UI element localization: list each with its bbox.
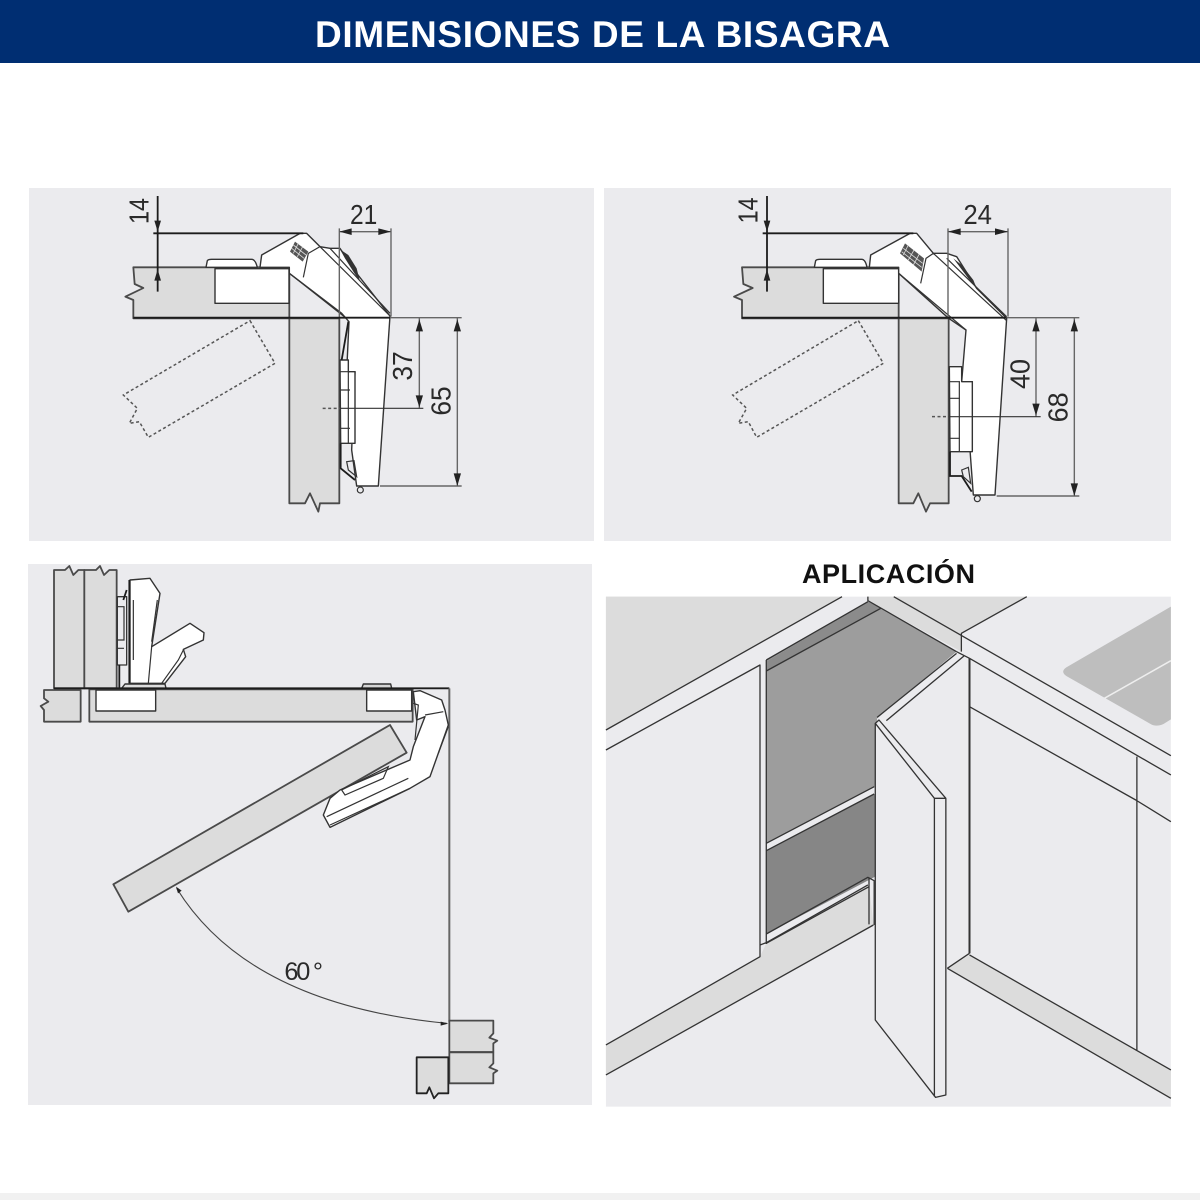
panel: hinge dimensions 21 / 37 / 65: 21	[350, 199, 377, 230]
panel: hinge dimensions 24 / 40 / 68: 24	[963, 199, 992, 230]
open door leaf	[875, 720, 945, 1097]
panel: hinge dimensions 21 / 37 / 65: 65	[426, 386, 457, 416]
open door dotted outline	[733, 321, 883, 437]
open hinge on left	[130, 578, 204, 683]
dimension labels: 14	[732, 197, 763, 223]
left countertop	[606, 597, 842, 730]
heading: application: APLICACIÓN	[802, 558, 975, 589]
cabinet side board	[734, 267, 899, 318]
panel: hinge dimensions 21 / 37 / 65: 37	[387, 351, 418, 381]
panel: application illustration	[606, 597, 1171, 1107]
arrows	[154, 221, 461, 486]
line work	[606, 597, 1171, 1075]
door board	[899, 318, 949, 512]
arrows	[764, 221, 1078, 496]
panel: hinge dimensions 21 / 37 / 65	[29, 188, 594, 541]
top board with pockets	[89, 689, 413, 722]
dimension lines	[153, 196, 303, 292]
plinths	[606, 885, 873, 1075]
door board	[289, 318, 339, 512]
title banner: DIMENSIONES DE LA BISAGRA	[315, 14, 890, 55]
panel: hinge dimensions 24 / 40 / 68: 68	[1042, 392, 1073, 422]
hinge body	[869, 233, 1007, 495]
open door dotted outline	[123, 321, 275, 437]
open door at 60 degrees	[113, 725, 407, 912]
panel: hinge dimensions 24 / 40 / 68: 40	[1004, 359, 1035, 389]
left wall stub	[41, 690, 81, 722]
title banner	[0, 0, 1200, 63]
dimension lines	[763, 196, 913, 292]
mounting plate	[340, 360, 355, 443]
dimension labels: 14	[124, 198, 155, 224]
panel: hinge dimensions 24 / 40 / 68	[604, 188, 1171, 541]
angle label: 60 °	[284, 958, 323, 986]
mounting plate	[949, 367, 972, 452]
hinge body	[260, 233, 390, 486]
hinge on open door	[323, 691, 448, 827]
cabinet interior	[766, 602, 957, 843]
angle arc	[177, 888, 447, 1023]
hinge cup pocket	[823, 269, 899, 303]
sink	[1063, 607, 1171, 726]
hinge cup pocket	[215, 269, 289, 303]
bottom wall stubs	[449, 1021, 497, 1052]
cabinet side board	[125, 267, 289, 318]
panel: 60 degree opening angle	[28, 564, 592, 1105]
cabinet boards, closed position	[54, 566, 84, 688]
reference lines	[54, 687, 449, 689]
